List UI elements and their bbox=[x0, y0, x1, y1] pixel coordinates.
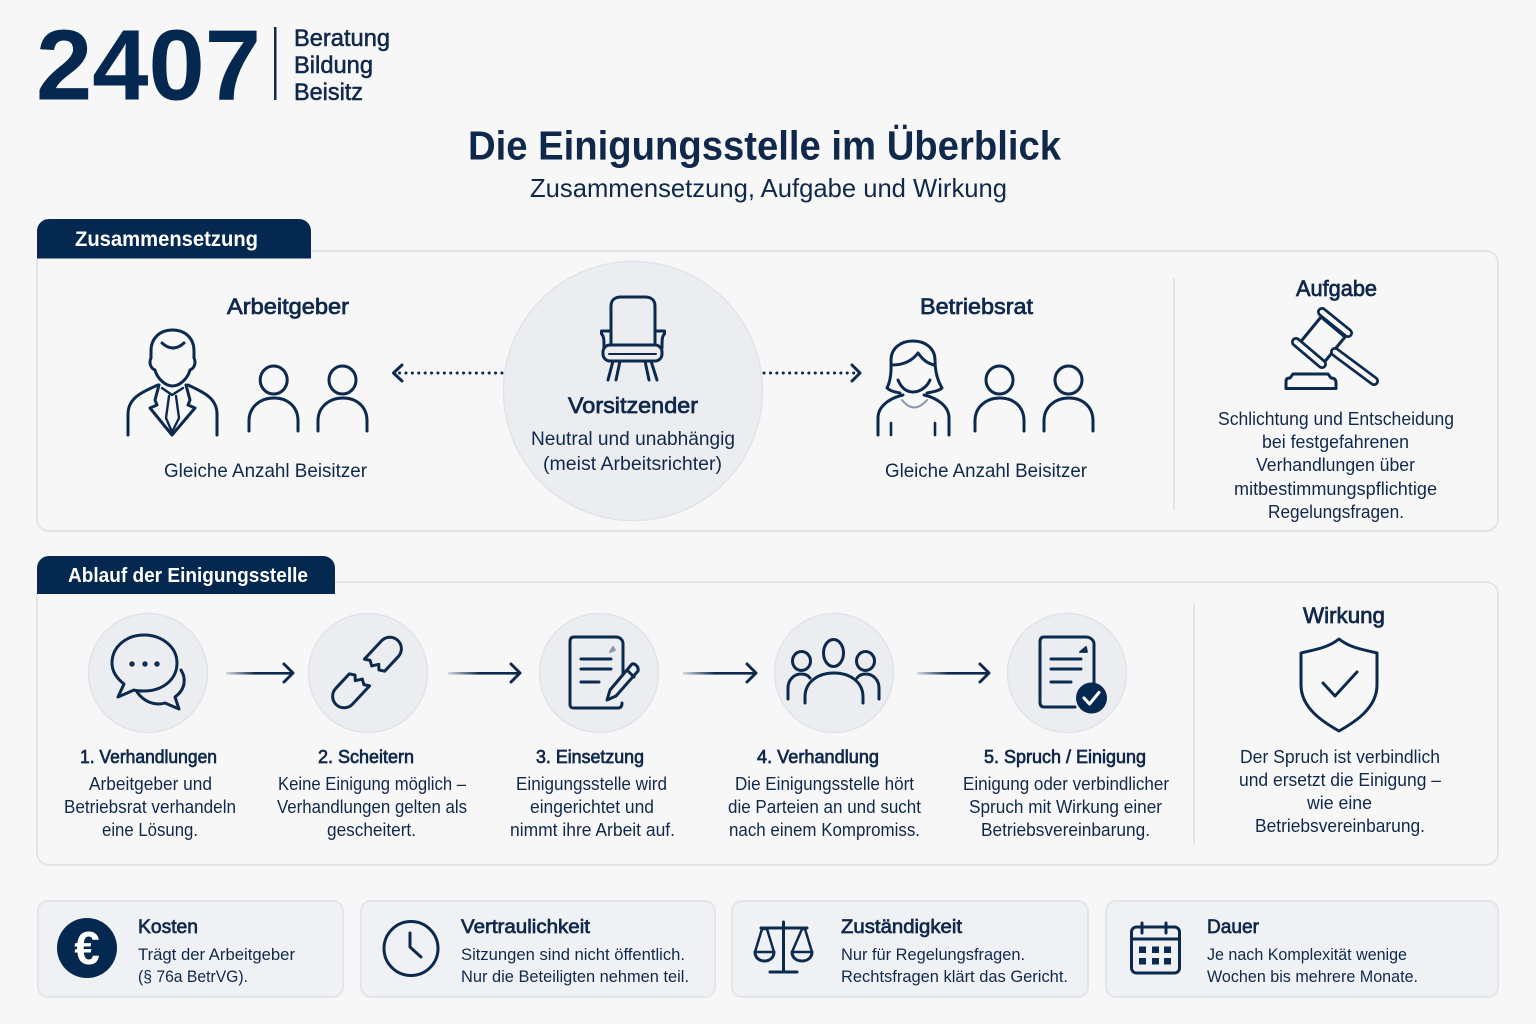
text: step 2: gescheitert. bbox=[327, 820, 416, 840]
text: effect description: wie eine bbox=[1306, 793, 1372, 813]
heading: Arbeitgeber: Arbeitgeber bbox=[227, 294, 350, 319]
step 2: Scheitern bbox=[277, 614, 467, 840]
text: Kosten bbox=[138, 916, 295, 986]
text: task description: Regelungsfragen. bbox=[1268, 502, 1404, 522]
tab: Zusammensetzung bbox=[37, 219, 311, 258]
text: Vertraulichkeit: Vertraulichkeit bbox=[461, 916, 591, 938]
text: Kosten: Trägt der Arbeitgeber bbox=[138, 945, 295, 964]
tab: Zusammensetzung: Zusammensetzung bbox=[75, 228, 258, 251]
text: Zuständigkeit: Nur für Regelungsfragen. bbox=[841, 945, 1025, 964]
text: Zuständigkeit: Zuständigkeit bbox=[841, 916, 963, 938]
text: Dauer: Wochen bis mehrere Monate. bbox=[1207, 967, 1418, 986]
arrow: left dotted bbox=[394, 365, 502, 381]
arrow 1 bbox=[226, 664, 293, 682]
text: effect description: Betriebsvereinbarung. bbox=[1255, 816, 1425, 836]
text: Vertraulichkeit: Nur die Beteiligten nehmen teil. bbox=[461, 967, 689, 986]
text: step 2: Verhandlungen gelten als bbox=[277, 797, 467, 817]
text: Zuständigkeit: Rechtsfragen klärt das Gericht. bbox=[841, 967, 1068, 986]
icon: assessor bbox=[318, 366, 367, 431]
logo: Beisitz bbox=[294, 79, 363, 106]
logo bbox=[36, 10, 390, 122]
heading: Betriebsrat: Betriebsrat bbox=[920, 294, 1034, 319]
text: step 2: Keine Einigung möglich – bbox=[278, 774, 466, 794]
text: Zuständigkeit bbox=[841, 916, 1068, 986]
icon: chair bbox=[602, 297, 664, 380]
text: task description bbox=[1218, 409, 1454, 522]
icon: clock bbox=[384, 922, 438, 976]
icon: man in suit bbox=[128, 330, 217, 435]
icon: scales bbox=[755, 922, 812, 972]
text: step 3: nimmt ihre Arbeit auf. bbox=[510, 820, 675, 840]
text: task description: Schlichtung und Entscheidung bbox=[1218, 409, 1454, 429]
text: step 4: die Parteien an und sucht bbox=[728, 797, 921, 817]
text: task description: Verhandlungen über bbox=[1256, 455, 1415, 475]
text: Vertraulichkeit: Sitzungen sind nicht öffentlich. bbox=[461, 945, 685, 964]
icon: broken chain bbox=[328, 632, 406, 713]
card: Zuständigkeit bbox=[732, 901, 1088, 997]
tab: Ablauf der Einigungsstelle bbox=[37, 556, 335, 594]
icon: document with check bbox=[1040, 637, 1107, 714]
text: Dauer: Dauer bbox=[1207, 916, 1259, 938]
text: Dauer bbox=[1207, 916, 1418, 986]
text: step 3: eingerichtet und bbox=[530, 797, 654, 817]
panel: Ablauf bbox=[37, 556, 1498, 865]
text: Dauer: Je nach Komplexität wenige bbox=[1207, 945, 1407, 964]
icon: calendar bbox=[1132, 923, 1180, 973]
logo: 2407 bbox=[36, 10, 261, 122]
text: step 1: Betriebsrat verhandeln bbox=[64, 797, 236, 817]
text: step 5: Einigung oder verbindlicher bbox=[963, 774, 1169, 794]
arrow 4 bbox=[917, 664, 989, 682]
text: Vorsitzender: Vorsitzender bbox=[568, 393, 699, 418]
text: neutral bbox=[531, 428, 735, 475]
logo: Bildung bbox=[294, 52, 373, 79]
icon: euro: € bbox=[74, 922, 100, 974]
text: step 5: Spruch mit Wirkung einer bbox=[969, 797, 1162, 817]
heading: Wirkung: Wirkung bbox=[1303, 603, 1385, 628]
text: step 4: 4. Verhandlung bbox=[757, 746, 879, 767]
text: step 4: nach einem Kompromiss. bbox=[729, 820, 920, 840]
text: step 1 bbox=[64, 746, 236, 840]
icon: euro bbox=[57, 918, 117, 978]
step 4: Verhandlung bbox=[728, 614, 921, 840]
text: step 5: 5. Spruch / Einigung bbox=[984, 746, 1146, 767]
step 3: Einsetzung bbox=[510, 614, 675, 840]
text: equal assessors works council: Gleiche Anzahl Beisitzer bbox=[885, 460, 1087, 482]
logo: Beratung bbox=[294, 25, 390, 52]
subtitle: Zusammensetzung, Aufgabe und Wirkung bbox=[530, 173, 1007, 203]
icon: assessor bbox=[249, 366, 298, 431]
text: step 5: Betriebsvereinbarung. bbox=[981, 820, 1150, 840]
text: neutral: Neutral und unabhängig bbox=[531, 428, 735, 450]
text: step 2 bbox=[277, 746, 467, 840]
text: step 1: 1. Verhandlungen bbox=[80, 746, 217, 767]
arrow 2 bbox=[448, 664, 520, 682]
icon: assessor bbox=[1044, 366, 1093, 431]
text: step 2: 2. Scheitern bbox=[318, 746, 414, 767]
icon: woman bbox=[878, 341, 949, 435]
icon: assessor bbox=[975, 366, 1024, 431]
icon: gavel bbox=[1286, 312, 1374, 388]
arrow: right dotted bbox=[764, 365, 860, 381]
text: step 3 bbox=[510, 746, 675, 840]
text: step 4: Die Einigungsstelle hört bbox=[735, 774, 914, 794]
text: step 1: eine Lösung. bbox=[102, 820, 198, 840]
text: Kosten: Kosten bbox=[138, 916, 198, 938]
text: Kosten: (§ 76a BetrVG). bbox=[138, 967, 248, 986]
panel: Zusammensetzung bbox=[37, 219, 1498, 531]
text: equal assessors employer: Gleiche Anzahl Beisitzer bbox=[164, 460, 367, 482]
text: Vertraulichkeit bbox=[461, 916, 689, 986]
text: task description: mitbestimmungspflichtige bbox=[1234, 479, 1437, 499]
card: Vertraulichkeit bbox=[361, 901, 715, 997]
text: step 3: Einigungsstelle wird bbox=[516, 774, 667, 794]
text: step 1: Arbeitgeber und bbox=[89, 774, 212, 794]
text: step 3: 3. Einsetzung bbox=[536, 746, 644, 767]
title: Die Einigungsstelle im Überblick bbox=[468, 122, 1061, 168]
text: effect description: Der Spruch ist verbindlich bbox=[1240, 747, 1440, 767]
step 1: Verhandlungen bbox=[64, 614, 236, 840]
heading: Aufgabe: Aufgabe bbox=[1296, 276, 1377, 301]
text: task description: bei festgefahrenen bbox=[1262, 432, 1409, 452]
text: step 4 bbox=[728, 746, 921, 840]
step 5: Spruch / Einigung bbox=[963, 614, 1169, 840]
icon: group of people bbox=[788, 640, 879, 703]
icon: shield with check bbox=[1301, 639, 1377, 731]
text: effect description: und ersetzt die Einigung – bbox=[1239, 770, 1441, 790]
text: step 5 bbox=[963, 746, 1169, 840]
arrow 3 bbox=[683, 664, 756, 682]
circle: chairperson bbox=[504, 262, 762, 520]
icon: speech bubbles bbox=[112, 635, 184, 709]
text: neutral: (meist Arbeitsrichter) bbox=[543, 453, 722, 475]
icon: document and pen bbox=[570, 637, 638, 708]
card: Dauer bbox=[1106, 901, 1498, 997]
tab: Ablauf der Einigungsstelle: Ablauf der Einigungsstelle bbox=[68, 565, 308, 587]
text: effect description bbox=[1239, 747, 1441, 836]
card: Kosten bbox=[38, 901, 343, 997]
